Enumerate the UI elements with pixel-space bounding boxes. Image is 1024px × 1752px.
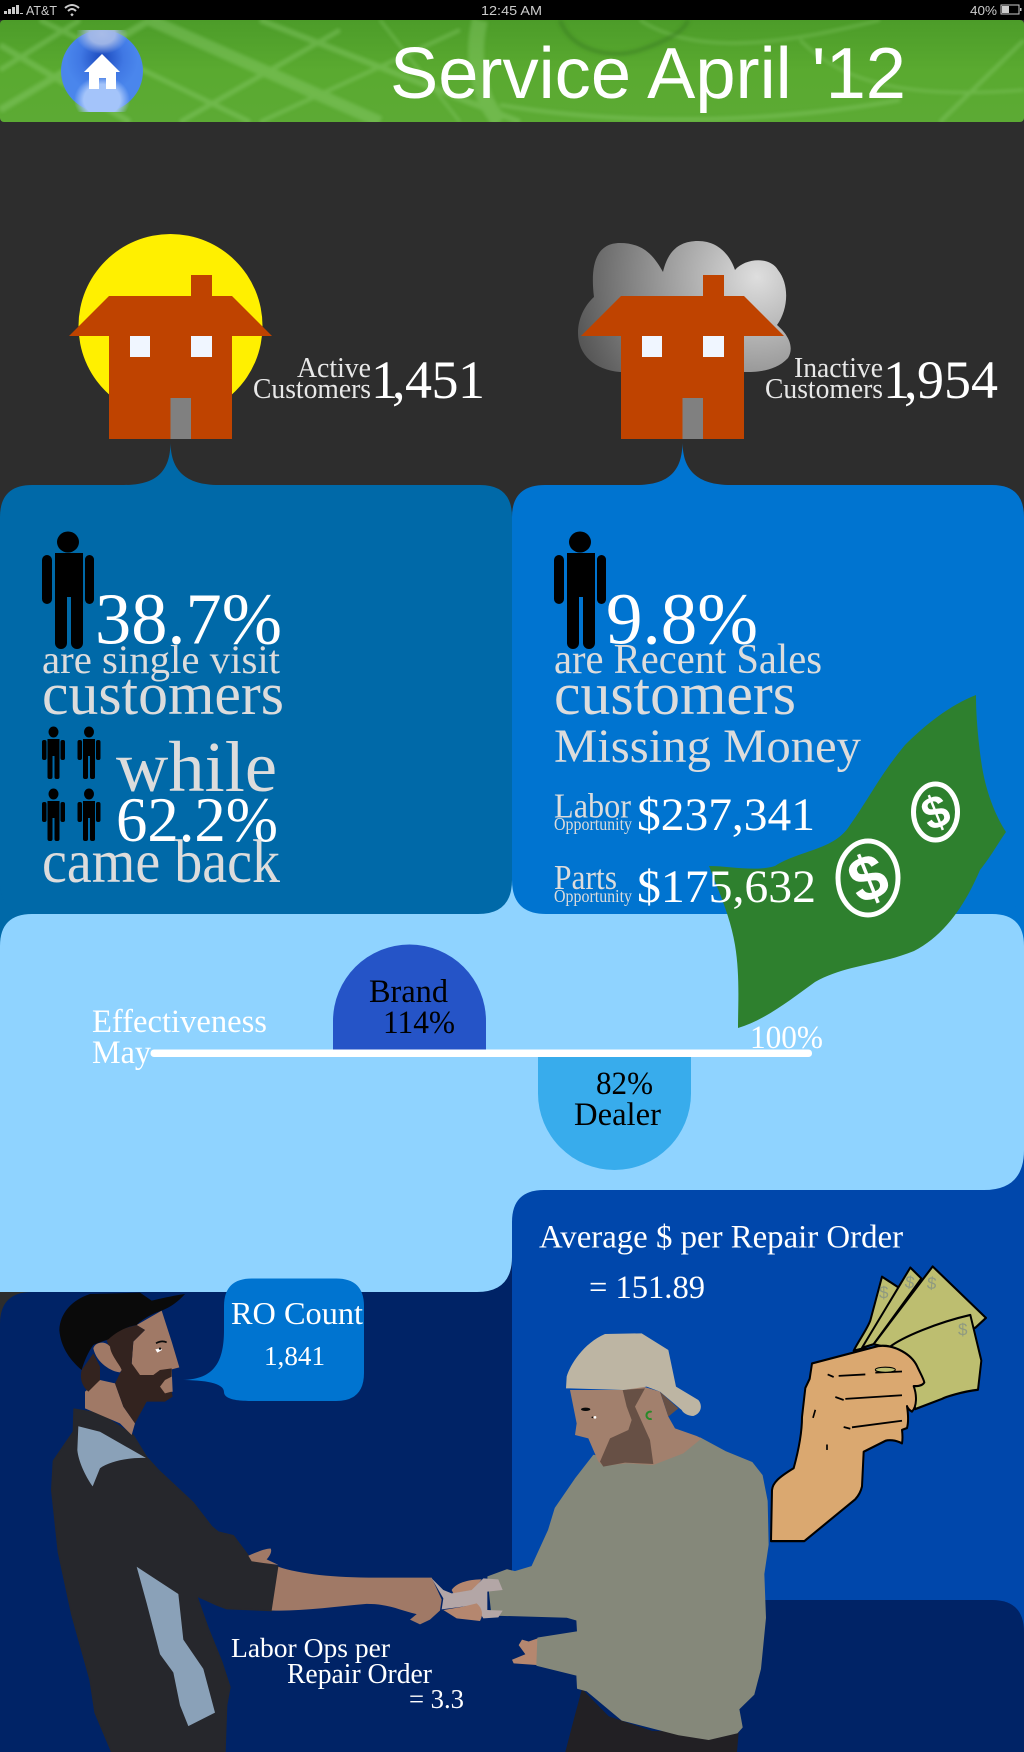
- icon: dollar coin small: $: [914, 783, 957, 841]
- label: Labor: [554, 786, 631, 826]
- label: Customers: [765, 374, 883, 405]
- panel: average per repair order: [512, 1190, 1024, 1752]
- dollar mark: $: [904, 1272, 916, 1293]
- dollar mark: $: [958, 1320, 968, 1339]
- illustration: hand holding cash: [771, 1266, 986, 1541]
- finger lines: [813, 1372, 902, 1450]
- clock: 12:45 AM: [481, 3, 542, 18]
- header banner: [0, 20, 1024, 122]
- icon: large person, single visit: [42, 532, 94, 649]
- panel: effectiveness: [0, 914, 1024, 1292]
- caption: are Recent Sales: [554, 637, 822, 683]
- bar value: 114%: [383, 1005, 455, 1041]
- illustration: mechanic with cap: [52, 1293, 442, 1752]
- target label: 100%: [750, 1020, 823, 1056]
- backing fills behind panel corners: [0, 870, 1024, 1310]
- status bar: [0, 0, 1024, 20]
- illustration: mechanic with white cap: [488, 1333, 768, 1752]
- value: $175,632: [637, 861, 816, 913]
- icon: inactive customers house: [581, 275, 784, 439]
- label: Parts: [554, 858, 617, 897]
- label: Average $ per Repair Order: [539, 1220, 903, 1256]
- carrier label: AT&T: [26, 3, 57, 18]
- label: Labor Ops per: [231, 1633, 390, 1663]
- panel: RO count and labor ops: [0, 1292, 512, 1752]
- home button: [61, 30, 143, 112]
- inactive customers stat: [765, 350, 998, 410]
- label: Inactive: [794, 353, 883, 384]
- label: RO Count: [231, 1295, 363, 1331]
- value: 1,841: [264, 1341, 325, 1371]
- labor ops per repair order text: [231, 1633, 464, 1714]
- label: Repair Order: [287, 1659, 433, 1690]
- average per repair order text: [539, 1220, 903, 1306]
- bar value: 82%: [596, 1066, 653, 1102]
- caption: are single visit: [42, 637, 280, 682]
- hand: [771, 1346, 924, 1541]
- label: Opportunity: [554, 886, 632, 906]
- baseline: [150, 1050, 812, 1057]
- icon: active customers house: [69, 275, 272, 439]
- stat: 38.7%: [95, 578, 282, 660]
- value: 1,451: [371, 350, 485, 410]
- visit statistics text: [42, 578, 284, 896]
- bar label: Dealer: [574, 1097, 661, 1133]
- value: = 3.3: [409, 1684, 464, 1714]
- head: [59, 1293, 185, 1435]
- panel: active customers detail: [0, 443, 512, 914]
- caption: while: [116, 727, 277, 807]
- chart: effectiveness brand vs dealer: [92, 944, 823, 1170]
- title: Service April '12: [390, 34, 906, 114]
- icon: cloud behind inactive house: [578, 241, 791, 372]
- value: $237,341: [637, 789, 815, 841]
- trousers and sweater: [488, 1438, 768, 1752]
- back bills: [854, 1266, 986, 1351]
- caption: came back: [42, 829, 280, 896]
- dollar marks on bills: [879, 1272, 968, 1339]
- label: Effectiveness: [92, 1004, 267, 1040]
- head: [566, 1333, 702, 1467]
- dollar mark: $: [879, 1283, 889, 1302]
- stat: 9.8%: [606, 578, 758, 660]
- label: Opportunity: [554, 814, 632, 834]
- front bill: [889, 1315, 981, 1409]
- label: Customers: [253, 374, 371, 405]
- label: May: [92, 1035, 152, 1071]
- speech bubble: RO count: [180, 1278, 364, 1401]
- bar label: Brand: [369, 974, 448, 1010]
- panel: inactive customers detail: [512, 443, 1024, 914]
- illustration: handshake wrench: [432, 1578, 503, 1621]
- icon: dollar coin large: $: [838, 838, 898, 918]
- value: = 151.89: [589, 1270, 705, 1306]
- icon: signal bars: [4, 5, 23, 14]
- label: Active: [297, 353, 371, 384]
- caption: customers: [42, 661, 284, 727]
- panel: lower right navy: [512, 1600, 1024, 1752]
- active customers stat: [253, 350, 485, 410]
- icon: sun behind active house: [78, 234, 262, 418]
- icon: battery: [1001, 5, 1022, 14]
- stat: 62.2%: [116, 785, 278, 855]
- icon: large person, recent sales: [554, 532, 606, 649]
- icon: wifi: [65, 5, 79, 15]
- value: 1,954: [883, 350, 998, 410]
- jacket: [52, 1409, 442, 1752]
- bar: brand: [333, 944, 486, 1050]
- illustration: flying money bill: [709, 695, 1006, 1028]
- icon: home: [84, 54, 120, 89]
- caption: customers: [554, 661, 796, 727]
- bar: dealer: [538, 1056, 691, 1170]
- battery percentage: 40%: [970, 3, 997, 18]
- dollar mark: $: [926, 1274, 938, 1293]
- recent sales and missing money text: [554, 578, 861, 913]
- icon: group of four people: [42, 726, 100, 841]
- heading: Missing Money: [554, 720, 861, 773]
